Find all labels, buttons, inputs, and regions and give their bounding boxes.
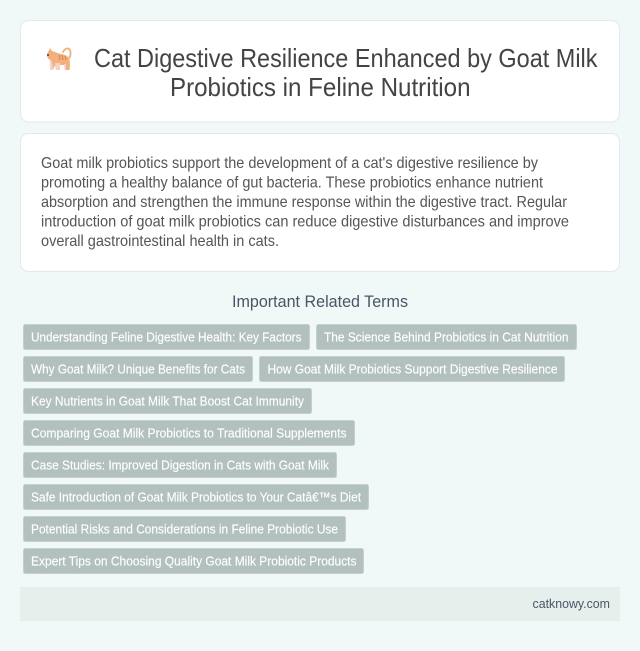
text block: description: overall gastrointestinal health in cats. [41,233,279,250]
title [94,43,598,102]
tag: potential risks: Potential Risks and Considerations in Feline Probiotic Use [31,522,338,536]
title: Probiotics in Feline Nutrition [170,72,470,102]
tag: expert tips: Expert Tips on Choosing Quality Goat Milk Probiotic Products [31,554,357,568]
tag: key nutrients [24,388,312,414]
tag: digestive resilience [260,356,564,382]
tag: feline digestive health [24,324,310,350]
tag: why goat milk [24,356,252,382]
tag: digestive resilience: How Goat Milk Probiotics Support Digestive Resilience [268,362,558,376]
text block: description: promoting a healthy balance of gut bacteria. These probiotics enhance nutrient [41,174,543,192]
title: Cat Digestive Resilience Enhanced by Goat Milk [94,43,598,73]
footer bar [20,587,620,621]
tag: science behind probiotics: The Science Behind Probiotics in Cat Nutrition [324,330,568,344]
heading: related terms: Important Related Terms [232,292,408,311]
text block: description [41,155,569,250]
footer text: catknowy.com [532,596,610,611]
panel: title card [20,20,620,122]
tag: comparing supplements: Comparing Goat Milk Probiotics to Traditional Supplements [31,426,347,440]
tag: comparing supplements [24,420,354,446]
tag list [24,324,576,574]
text block: description: introduction of goat milk probiotics can reduce digestive disturbances and improve [41,214,569,230]
tag: feline digestive health: Understanding Feline Digestive Health: Key Factors [31,330,302,344]
tag: case studies [24,452,336,478]
tag: expert tips [24,548,364,574]
text block: description: absorption and strengthen the immune response within the digestive tract. Regular [41,194,568,211]
tag: safe introduction: Safe Introduction of Goat Milk Probiotics to Your Catâ€™s Diet [31,490,361,504]
tag: science behind probiotics [316,324,576,350]
tag: why goat milk: Why Goat Milk? Unique Benefits for Cats [31,362,245,376]
tag: key nutrients: Key Nutrients in Goat Milk That Boost Cat Immunity [31,394,304,408]
tag: case studies: Case Studies: Improved Digestion in Cats with Goat Milk [31,458,329,472]
text block: description: Goat milk probiotics support the development of a cat's digestive resilience by [41,155,538,172]
tag: potential risks [24,516,346,542]
tag: safe introduction [24,484,368,510]
icon: cat [47,48,71,70]
panel: description card [20,134,620,272]
